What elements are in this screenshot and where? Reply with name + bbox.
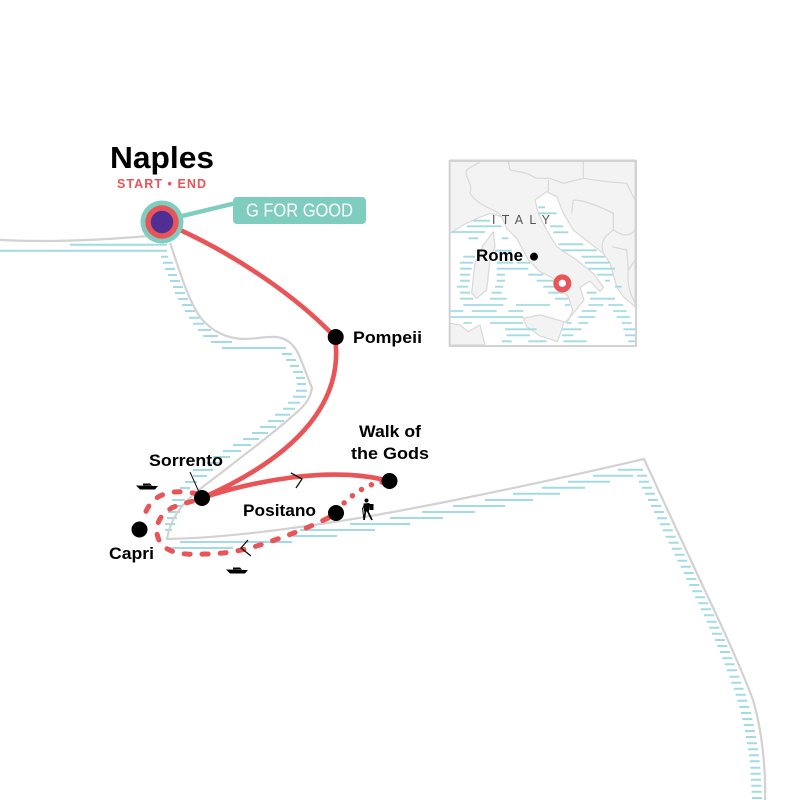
G for Good badge: G FOR GOOD <box>246 200 353 220</box>
Rome dot <box>530 253 538 261</box>
icon: hiker <box>362 498 374 520</box>
coastline <box>0 236 765 800</box>
subtitle: start and end: START • END <box>117 177 206 191</box>
icon: boat near Positano route <box>226 568 248 574</box>
inset border frame <box>450 161 636 346</box>
stop markers <box>132 329 398 538</box>
inset map: Italy <box>450 160 636 347</box>
label: Walk of the Gods <box>351 423 429 463</box>
label: Positano: Positano <box>243 502 316 520</box>
inset land masses <box>450 160 635 345</box>
Naples locator <box>556 277 569 290</box>
route: Sorrento to Capri and Positano by boat (dashed) <box>143 482 382 554</box>
label: Walk of the Gods: Walk of <box>359 423 422 441</box>
inset borders <box>466 162 635 303</box>
route: Naples to Pompeii to Sorrento to Walk of the Gods <box>178 229 389 498</box>
Sorrento leader line <box>190 472 199 492</box>
sea hatching <box>0 245 762 798</box>
Naples marker <box>140 200 184 244</box>
G for Good badge <box>233 197 366 224</box>
label: Italy: ITALY <box>492 213 551 227</box>
label: Walk of the Gods: the Gods <box>351 445 429 463</box>
title: Naples: Naples <box>110 140 214 175</box>
label: Pompeii: Pompeii <box>353 329 422 347</box>
label: Rome: Rome <box>476 247 523 265</box>
direction arrows <box>241 473 302 556</box>
connector to G for Good <box>178 203 236 217</box>
inset sea hatching <box>450 207 635 341</box>
icon: boat near Sorrento <box>136 484 158 490</box>
label: Sorrento: Sorrento <box>149 452 223 470</box>
label: Capri: Capri <box>109 545 154 563</box>
walking trail: dotted <box>328 482 382 518</box>
